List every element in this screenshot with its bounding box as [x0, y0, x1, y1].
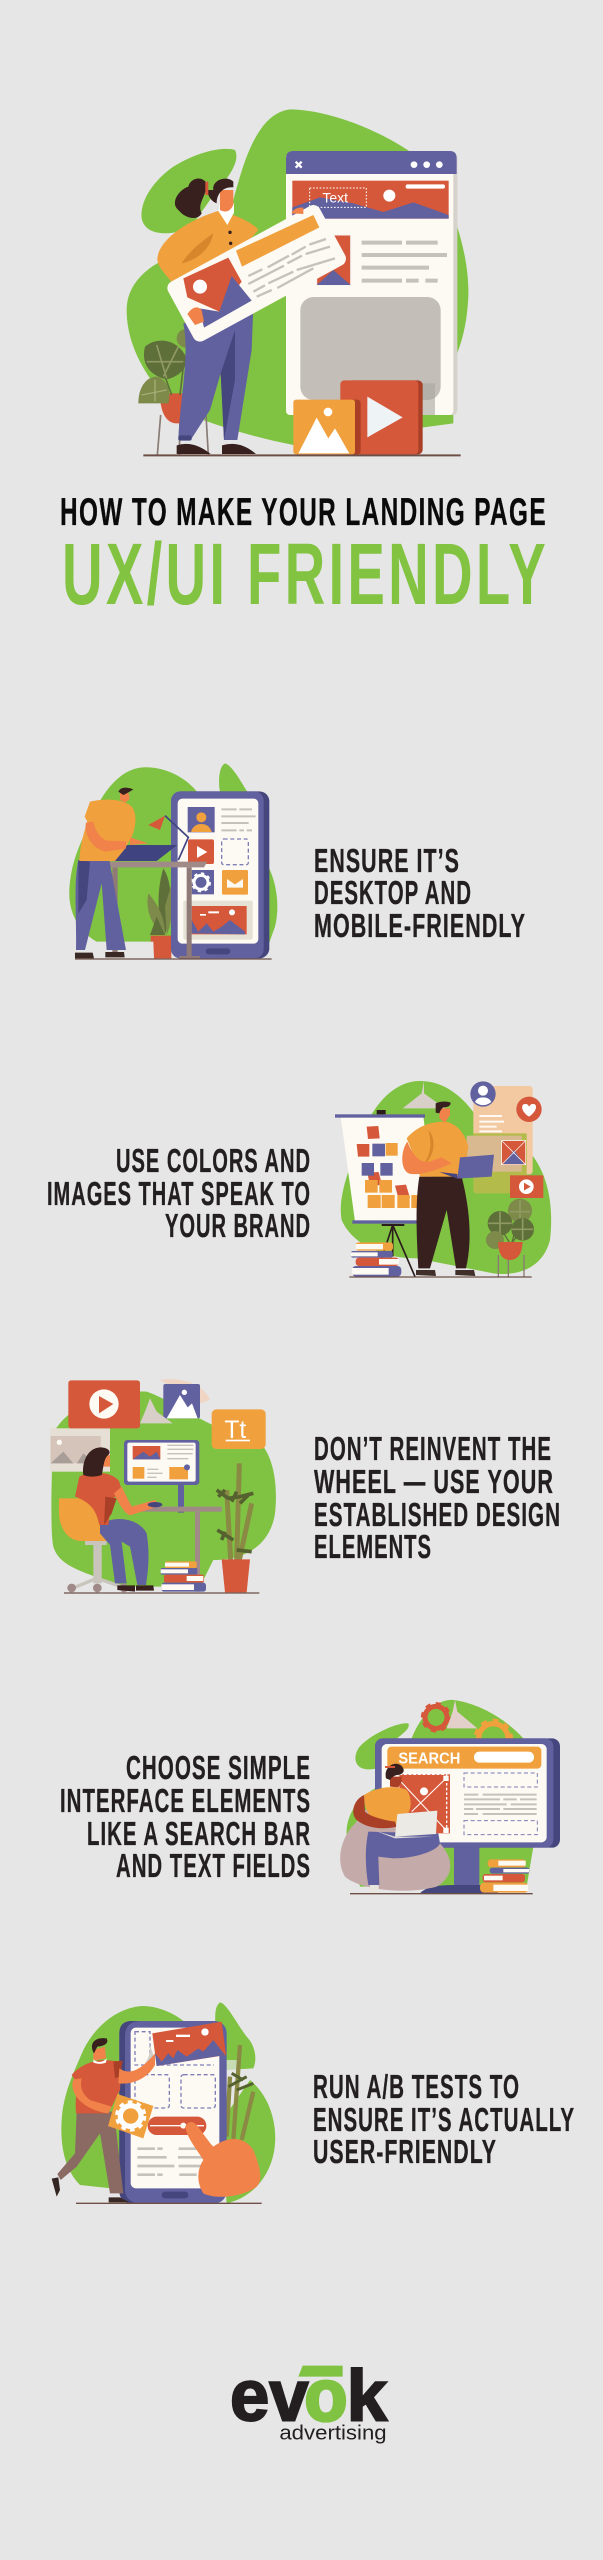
logo: evok advertising: o	[305, 2356, 347, 2437]
red gear	[422, 1704, 450, 1731]
step 4 illustration: search interface on large monitor	[340, 1700, 560, 1894]
type tile: Tt	[224, 1417, 246, 1444]
step 5 illustration: man with phone and A/B slider	[52, 2002, 275, 2203]
ground line	[143, 452, 461, 458]
monitor with search UI: SEARCH	[398, 1750, 460, 1767]
held content card	[165, 202, 349, 344]
step 5 text	[313, 2068, 575, 2170]
potted plant	[138, 329, 208, 455]
monitor	[124, 1440, 199, 1513]
man figure	[52, 2038, 155, 2202]
step 2 text: USE COLORS AND	[116, 1142, 311, 1179]
image tile	[502, 1141, 526, 1165]
stack of books	[161, 1561, 206, 1592]
step 5 text: USER-FRIENDLY	[313, 2133, 497, 2170]
ceiling lamp	[403, 1081, 445, 1108]
step 2 illustration: man at presentation board	[335, 1081, 551, 1277]
woman figure	[75, 1447, 162, 1592]
step 1 text: DESKTOP AND	[314, 874, 472, 911]
step 4 text: LIKE A SEARCH BAR	[87, 1815, 311, 1852]
web page window: Text	[322, 190, 348, 206]
stack of books	[480, 1859, 530, 1893]
smartphone with UI tiles	[171, 791, 269, 958]
web page window	[286, 151, 457, 415]
image tile	[160, 1379, 210, 1418]
logo: evok advertising: advertising	[279, 2422, 387, 2444]
orange gear	[475, 1720, 511, 1756]
step 2 text	[47, 1142, 311, 1244]
step 1 text: ENSURE IT’S	[314, 842, 460, 879]
step 4 text: INTERFACE ELEMENTS	[60, 1782, 311, 1819]
logo: evok advertising: ev	[230, 2356, 309, 2437]
video tile	[68, 1380, 140, 1428]
plant on stand	[486, 1199, 534, 1277]
settings card	[108, 2094, 153, 2138]
green blob	[341, 1081, 551, 1274]
peeled image banner	[137, 2022, 226, 2072]
stack of books	[351, 1242, 401, 1277]
plant and pot	[147, 868, 173, 958]
green blob	[51, 1392, 276, 1587]
step 4 text: CHOOSE SIMPLE	[126, 1749, 311, 1786]
bamboo plant	[225, 2045, 253, 2140]
desk with drawing tablet and lamp	[89, 816, 207, 958]
green blobs	[69, 763, 277, 950]
video tile	[510, 1175, 543, 1198]
green blobs	[61, 2002, 275, 2203]
ceiling lamp	[447, 1700, 477, 1728]
ground line	[75, 957, 272, 961]
title	[60, 491, 549, 623]
heart badge	[516, 1097, 542, 1122]
step 3 illustration: woman at desktop computer	[50, 1379, 276, 1593]
image tile icon	[293, 400, 361, 454]
hero illustration: woman holding card beside web page	[127, 109, 468, 455]
logo: evok advertising	[230, 2356, 388, 2444]
desk	[140, 1507, 222, 1592]
step 1 illustration: phone and standing designer	[69, 763, 277, 959]
ground line	[350, 1892, 533, 1896]
woman figure	[157, 179, 258, 454]
ground line	[76, 2201, 262, 2205]
translucent web panel	[467, 1086, 533, 1193]
beanbag seat	[340, 1807, 450, 1891]
video tile icon	[340, 380, 423, 454]
step 4 text	[60, 1749, 311, 1884]
step 2 text: YOUR BRAND	[165, 1207, 311, 1244]
avatar badge	[470, 1081, 496, 1107]
green blob background	[127, 109, 468, 445]
green blobs	[347, 1700, 533, 1887]
woman figure with laptop	[353, 1764, 440, 1894]
ground line	[64, 1591, 259, 1595]
step 3 text: ELEMENTS	[314, 1528, 432, 1565]
pointing hand	[185, 2122, 260, 2197]
man figure with laptop	[402, 1101, 494, 1276]
ceiling lamp	[140, 1398, 173, 1423]
step 4 text: AND TEXT FIELDS	[116, 1847, 311, 1884]
step 2 text: IMAGES THAT SPEAK TO	[47, 1175, 311, 1212]
step 1 text	[314, 842, 526, 944]
potted bamboo plant	[217, 1463, 253, 1592]
type tile	[212, 1409, 266, 1449]
man figure	[75, 788, 148, 958]
ground line	[349, 1275, 532, 1279]
monitor with search UI	[375, 1738, 560, 1893]
step 3 text	[314, 1430, 561, 1565]
logo: evok advertising: k	[347, 2356, 388, 2437]
smartphone UI	[119, 2021, 227, 2203]
orange chair	[59, 1498, 128, 1592]
presentation board with sticky notes	[335, 1110, 442, 1277]
wall picture	[50, 1428, 110, 1472]
